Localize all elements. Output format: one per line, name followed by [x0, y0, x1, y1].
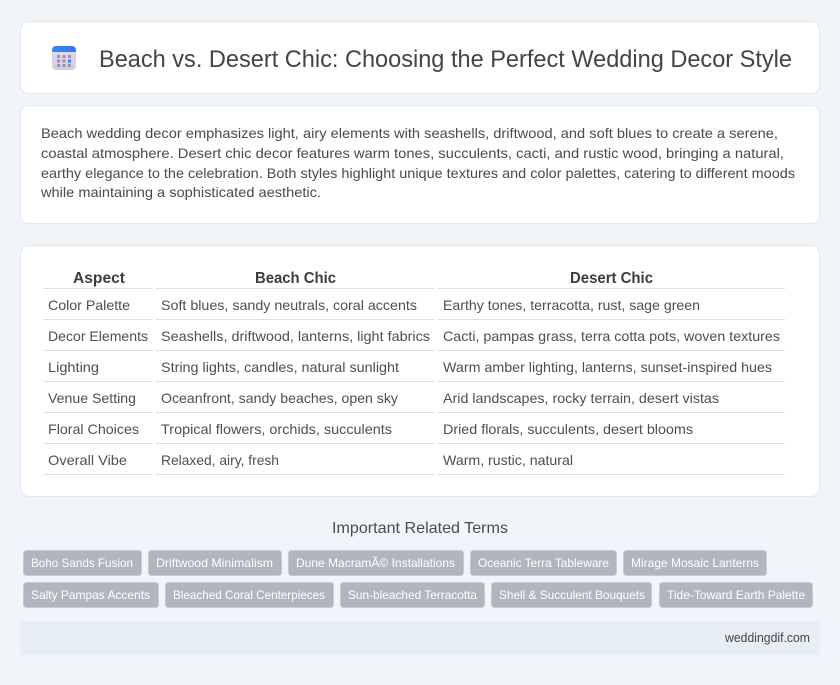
table row: decor elements: Decor Elements [48, 328, 148, 344]
table row: floral choices: Floral Choices [48, 421, 139, 437]
table row: overall vibe: Warm, rustic, natural [443, 452, 573, 468]
tag list: related terms [24, 550, 812, 608]
tag list: related terms: Dune MacramÃ© Installations [296, 556, 455, 570]
text block: introduction: while maintaining a sophisticated aesthetic. [40, 184, 321, 200]
tag list: related terms: Shell & Succulent Bouquets [499, 588, 645, 602]
heading: related terms: Important Related Terms [332, 520, 508, 537]
table row: lighting: String lights, candles, natural sunlight [161, 359, 399, 375]
table header: Aspect [73, 270, 126, 287]
text block: introduction [40, 125, 795, 200]
table row: floral choices: Dried florals, succulents, desert blooms [443, 421, 693, 437]
panel: introduction [20, 106, 820, 224]
table row: color palette: Earthy tones, terracotta, rust, sage green [443, 297, 700, 313]
tag list: related terms: Mirage Mosaic Lanterns [631, 556, 759, 570]
table row: floral choices [48, 421, 693, 437]
footer: weddingdif.com [724, 630, 810, 645]
table row: decor elements [48, 328, 780, 344]
table row: overall vibe: Relaxed, airy, fresh [161, 452, 279, 468]
text block: introduction: earthy elegance to the celebration. Both styles highlight unique textures and color palettes, catering to different moods [41, 165, 795, 181]
tag list: related terms: Boho Sands Fusion [31, 556, 133, 570]
table row: venue setting [48, 390, 719, 406]
table row: color palette [48, 297, 700, 313]
tag list: related terms: Driftwood Minimalism [156, 556, 273, 570]
tag list: related terms: Bleached Coral Centerpieces [173, 588, 325, 602]
table row: decor elements: Seashells, driftwood, lanterns, light fabrics [161, 328, 430, 344]
table row: lighting: Lighting [48, 359, 99, 375]
title: Beach vs. Desert Chic: Choosing the Perfect Wedding Decor Style [99, 46, 792, 73]
footer [20, 621, 820, 655]
table row: overall vibe: Overall Vibe [48, 452, 127, 468]
table row: decor elements: Cacti, pampas grass, terra cotta pots, woven textures [443, 328, 780, 344]
table row: overall vibe [48, 452, 573, 468]
tag list: related terms: Salty Pampas Accents [31, 588, 150, 602]
table row: floral choices: Tropical flowers, orchids, succulents [161, 421, 392, 437]
panel: header [20, 22, 820, 94]
table header: Beach Chic [255, 270, 336, 287]
panel: comparison table [20, 246, 820, 496]
text block: introduction: coastal atmosphere. Desert chic decor features warm tones, succulents, cacti, and rustic wood, bringing a natural, [41, 145, 784, 161]
table header: Desert Chic [570, 270, 653, 287]
table row: lighting [48, 359, 772, 375]
table row: venue setting: Arid landscapes, rocky terrain, desert vistas [443, 390, 719, 406]
tag list: related terms: Tide-Toward Earth Palette [667, 588, 805, 602]
table header [73, 270, 653, 287]
table row: venue setting: Oceanfront, sandy beaches, open sky [161, 390, 398, 406]
tag list: related terms: Oceanic Terra Tableware [478, 556, 609, 570]
tag list: related terms: Sun-bleached Terracotta [348, 588, 477, 602]
table row: color palette: Soft blues, sandy neutrals, coral accents [161, 297, 417, 313]
table row: venue setting: Venue Setting [48, 390, 136, 406]
table row: lighting: Warm amber lighting, lanterns, sunset-inspired hues [443, 359, 772, 375]
icon: calendar [52, 46, 76, 70]
text block: introduction: Beach wedding decor emphasizes light, airy elements with seashells, driftwood, and soft blues to create a serene, [41, 125, 778, 141]
table row: color palette: Color Palette [48, 297, 130, 313]
